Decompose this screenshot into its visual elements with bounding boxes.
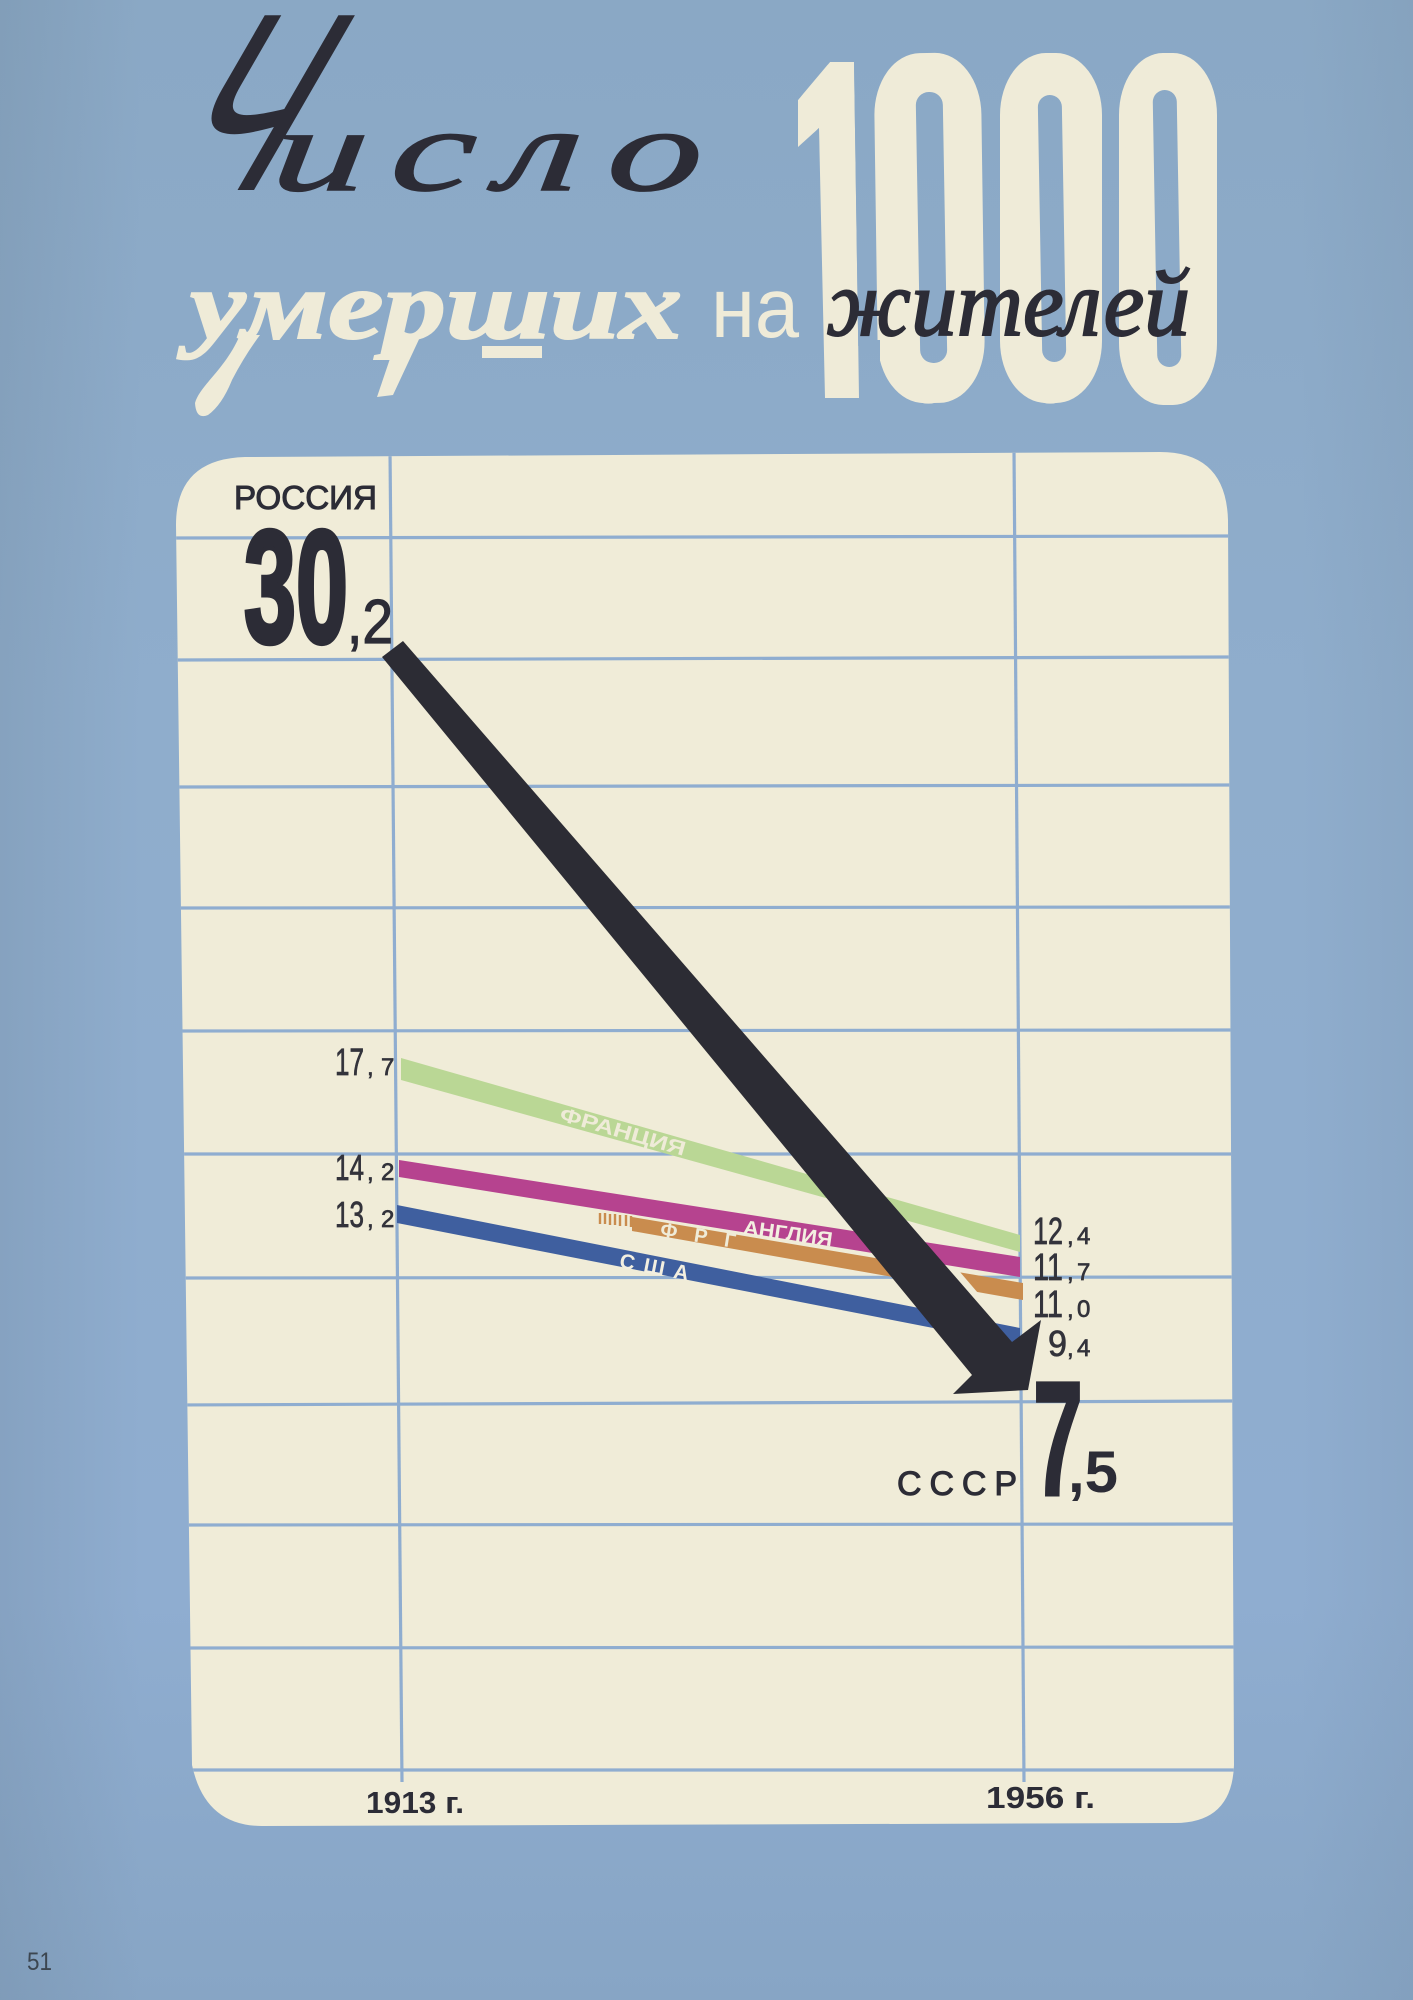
value: ФРГ 11,0: ,0: [1067, 1296, 1090, 1323]
band: Англия: [399, 1160, 1020, 1277]
band: Англия: АНГЛИЯ: [742, 1217, 834, 1251]
value: Англия 11,7: [1033, 1247, 1090, 1289]
value: США 9,4: [1048, 1323, 1090, 1364]
label: СССР: СССР: [897, 1465, 1017, 1503]
value: Англия 14,2: ,2: [367, 1159, 394, 1186]
value: 7,5: ,5: [1068, 1440, 1118, 1505]
value: Англия 14,2: [335, 1147, 394, 1188]
band: Франция: ФРАНЦИЯ: [557, 1104, 688, 1161]
value: Англия 11,7: ,7: [1067, 1259, 1090, 1286]
value: Франция 12,4: ,4: [1067, 1223, 1090, 1250]
value: Англия 14,2: 14: [335, 1147, 364, 1188]
arrow: Russia 30.2 to USSR 7.5: [382, 641, 1041, 1394]
axis label: 1913: 1913 г.: [366, 1785, 464, 1820]
value: США 13,2: 13: [335, 1194, 364, 1235]
value: 7,5: 7: [1033, 1347, 1083, 1530]
page number: 51: [27, 1948, 52, 1976]
value: Франция 17,7: ,7: [367, 1054, 394, 1081]
title word: Число: исло: [267, 85, 734, 216]
title word: на: на: [711, 261, 800, 356]
value: 30,2: 30: [244, 497, 348, 676]
value: США 9,4: 9: [1048, 1323, 1067, 1364]
title word: жителей: жителей: [826, 252, 1190, 356]
value: 30,2: ,2: [347, 588, 393, 657]
value: ФРГ 11,0: [1033, 1284, 1090, 1326]
chart panel: [170, 450, 1240, 1826]
label: Россия: РОССИЯ: [234, 479, 377, 516]
title word: Число: [119, 0, 734, 244]
value: Франция 17,7: 17: [335, 1042, 364, 1084]
title word: умерших: умерших: [177, 252, 682, 360]
value: Франция 12,4: 12: [1033, 1211, 1063, 1253]
value: США 13,2: [335, 1194, 394, 1235]
title word: умерших: [177, 252, 682, 416]
band: ФРГ: [600, 1213, 1023, 1300]
band: Франция: [401, 1058, 1020, 1252]
value: ФРГ 11,0: 11: [1033, 1284, 1063, 1326]
band: США: С Ш А: [618, 1250, 691, 1286]
value: Англия 11,7: 11: [1033, 1247, 1063, 1289]
band: ФРГ: Ф Р Г: [659, 1219, 737, 1253]
axis label: 1956: 1956 г.: [986, 1780, 1095, 1815]
band: США: [397, 1205, 1020, 1345]
value: США 13,2: ,2: [367, 1206, 394, 1233]
value: США 9,4: ,4: [1067, 1335, 1090, 1362]
